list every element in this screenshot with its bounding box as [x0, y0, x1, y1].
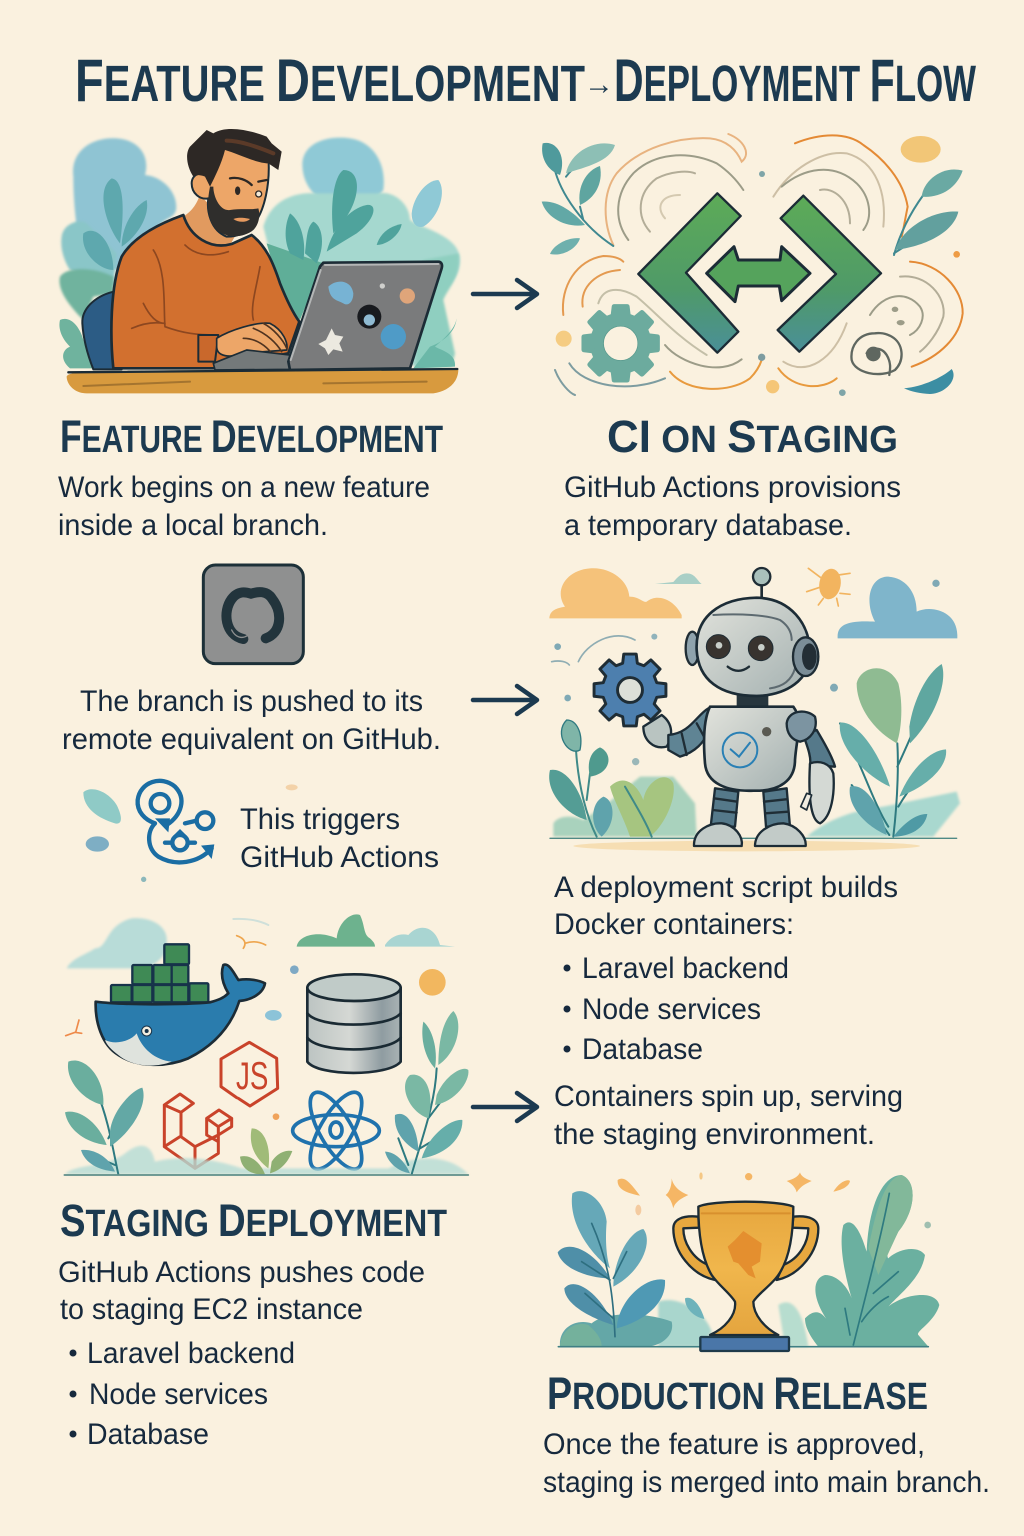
small plant	[251, 1128, 269, 1168]
text: deployment script: A deployment script builds	[554, 871, 898, 904]
list: containers: Database	[582, 1033, 703, 1066]
heading: Staging Deployment: STAGING DEPLOYMENT	[60, 1195, 447, 1246]
base	[700, 1337, 789, 1351]
title: →	[584, 68, 614, 101]
right arm	[803, 730, 835, 767]
whale	[96, 965, 265, 1065]
double arrow	[707, 247, 810, 302]
neck	[737, 695, 768, 707]
illustration: robot with gear	[549, 567, 960, 851]
swirls	[555, 134, 963, 395]
list: staging services: Laravel backend	[87, 1337, 295, 1370]
text: staging description	[58, 1256, 425, 1326]
face	[192, 147, 269, 237]
spiral	[851, 333, 902, 375]
list: containers: Laravel backend	[582, 952, 789, 985]
node js	[221, 1042, 278, 1106]
left arm	[643, 715, 671, 747]
leaves left	[554, 145, 613, 246]
text: feature development description: inside a local branch.	[58, 509, 328, 542]
cup	[698, 1202, 793, 1335]
text: CI description	[564, 471, 901, 542]
keyboard	[213, 350, 290, 370]
sparkles	[618, 1179, 640, 1196]
text: branch pushed: The branch is pushed to its	[80, 685, 423, 718]
torso	[704, 707, 799, 791]
arrow: trigger to robot	[473, 686, 537, 714]
list: staging services: Database	[87, 1418, 209, 1451]
ears	[686, 632, 699, 665]
gear	[584, 307, 657, 380]
text: branch pushed: remote equivalent on GitHub.	[62, 723, 441, 756]
text: deployment script: Docker containers:	[554, 908, 794, 941]
illustration: docker, database and stack logos	[64, 914, 468, 1176]
ground wash	[65, 1146, 468, 1174]
chair	[82, 292, 122, 369]
database	[307, 988, 401, 1073]
text: production description	[543, 1428, 990, 1499]
title: DEPLOYMENT FLOW	[614, 47, 977, 114]
plants left	[92, 1092, 125, 1174]
antenna	[758, 585, 766, 597]
scenery	[549, 568, 682, 618]
icon: GitHub Actions trigger	[83, 781, 298, 882]
plants left	[553, 777, 697, 837]
text: CI description: a temporary database.	[564, 509, 852, 542]
text: production description: Once the feature is approved,	[543, 1428, 925, 1461]
text: containers spin up: Containers spin up, serving	[554, 1080, 903, 1113]
list: containers: Node services	[582, 993, 761, 1026]
cuff and hand	[198, 335, 218, 362]
react	[293, 1085, 379, 1176]
list: staging services	[70, 1337, 295, 1451]
right plant	[805, 1175, 939, 1347]
arrow: development to CI	[473, 280, 537, 308]
laravel	[164, 1094, 232, 1168]
eyes	[230, 178, 267, 185]
text: CI description: GitHub Actions provisions	[564, 471, 901, 504]
heading: Feature Development: FEATURE DEVELOPMENT	[60, 411, 443, 462]
leaves right	[894, 195, 957, 255]
title	[75, 47, 977, 114]
plants right	[807, 792, 960, 837]
illustration: developer at laptop	[59, 129, 460, 393]
gear	[594, 654, 666, 726]
text: branch pushed	[62, 685, 441, 756]
text: staging description: to staging EC2 instance	[60, 1293, 363, 1326]
beard	[208, 187, 259, 236]
chevrons	[638, 193, 741, 353]
wash	[658, 1300, 712, 1347]
hair	[187, 129, 282, 187]
icon: GitHub	[203, 565, 303, 664]
neck	[183, 195, 237, 246]
text: containers spin up: the staging environment.	[554, 1118, 875, 1151]
scenery	[67, 918, 167, 968]
title: FEATURE DEVELOPMENT	[75, 47, 585, 114]
text: staging description: GitHub Actions pushes code	[58, 1256, 425, 1289]
text: triggers GitHub Actions	[240, 803, 439, 874]
plants right	[398, 1068, 453, 1174]
heading: Production Release: PRODUCTION RELEASE	[547, 1368, 928, 1419]
arrow: staging to containers	[473, 1093, 537, 1121]
sweater	[111, 215, 299, 368]
text: deployment script	[554, 871, 898, 941]
desk	[67, 369, 458, 393]
list: containers	[564, 952, 789, 1066]
illustration: CI code brackets	[542, 134, 963, 396]
list: staging services: Node services	[89, 1378, 268, 1411]
text: production description: staging is merged into main branch.	[543, 1466, 990, 1499]
illustration: trophy	[558, 1172, 939, 1351]
text: triggers GitHub Actions: This triggers	[240, 803, 400, 836]
dots	[901, 136, 941, 163]
laptop	[288, 262, 442, 370]
text: triggers GitHub Actions: GitHub Actions	[240, 841, 439, 874]
text: feature development description: Work begins on a new feature	[58, 471, 430, 504]
text: containers spin up	[554, 1080, 903, 1151]
left plant	[560, 1314, 672, 1347]
handles	[673, 1216, 715, 1280]
legs and feet	[711, 788, 738, 827]
containers	[111, 944, 208, 1002]
heading: CI on Staging: CI ON STAGING	[607, 411, 898, 462]
head	[697, 598, 810, 696]
illustration: docker, database and stack logos: JS	[236, 1054, 268, 1098]
text: feature development description	[58, 471, 430, 542]
